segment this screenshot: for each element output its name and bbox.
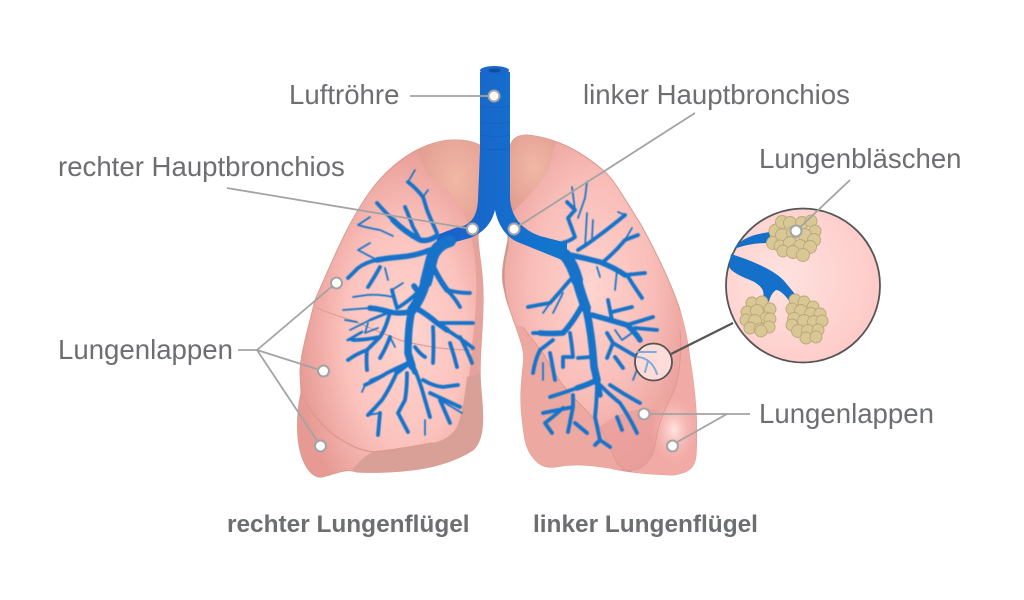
inner strip <box>469 234 483 376</box>
magnifier connector line <box>671 323 733 354</box>
leader lines: Lungenlappen left <box>238 283 336 445</box>
leader line: Lungenbläschen <box>796 180 850 231</box>
right lung <box>298 130 490 490</box>
label: Lungenlappen right: Lungenlappen <box>759 398 934 429</box>
upper lobe apex <box>418 140 480 223</box>
leader line: linker Hauptbronchios <box>514 113 695 229</box>
label: linker Hauptbronchios: linker Hauptbronchios <box>583 79 850 110</box>
alveoli cluster lower right <box>786 294 828 344</box>
magnifier lens <box>635 344 672 380</box>
leader line: rechter Hauptbronchios <box>227 188 472 229</box>
leader line: Luftröhre <box>410 95 494 97</box>
bronchial tree: right lung <box>343 170 473 435</box>
alveoli cluster lower left <box>740 296 776 337</box>
lower back lobe <box>515 324 622 470</box>
label: linker Lungenflügel: linker Lungenflügel <box>533 511 758 538</box>
right bottom lobe <box>632 310 696 475</box>
bronchial tree: left lung <box>528 182 657 447</box>
leader lines: Lungenlappen right <box>644 414 750 445</box>
label: rechter Lungenflügel: rechter Lungenflügel <box>227 511 470 538</box>
lower lobe shadow <box>352 373 482 472</box>
left lung <box>502 134 698 476</box>
magnified alveoli circle <box>726 208 880 362</box>
alveolar ducts <box>729 232 798 302</box>
label: Lungenbläschen: Lungenbläschen <box>759 143 962 174</box>
trachea and main bronchi <box>437 66 567 262</box>
label: Luftröhre: Luftröhre <box>289 79 399 110</box>
label: rechter Hauptbronchios: rechter Hauptbronchios <box>58 151 345 182</box>
alveoli cluster top <box>766 215 821 262</box>
central lobe lower shading <box>600 410 650 444</box>
label: Lungenlappen left: Lungenlappen <box>58 334 233 365</box>
upper lobe apex <box>510 135 556 212</box>
marker dots <box>315 90 802 452</box>
